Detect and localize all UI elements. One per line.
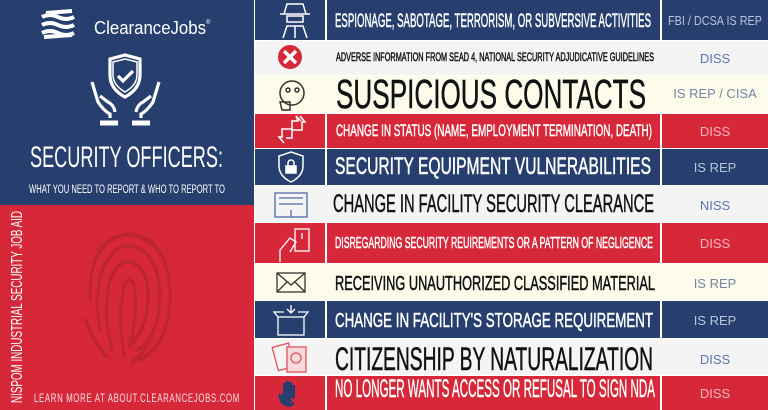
icon: hands with shield	[92, 55, 159, 123]
row 10: DISS	[700, 352, 730, 367]
panel: left intro	[0, 0, 254, 410]
icon: building	[275, 193, 307, 217]
row 5: IS REP	[694, 160, 736, 175]
icon: spy	[280, 4, 310, 38]
row 2	[255, 41, 768, 75]
row 9: IS REP	[694, 313, 736, 328]
icon: fingerprint	[86, 234, 170, 362]
title: SECURITY OFFICERS:	[30, 141, 223, 174]
footer link: LEARN MORE AT ABOUT.CLEARANCEJOBS.COM	[34, 391, 240, 405]
logo: ClearanceJobs: ®	[206, 19, 211, 26]
row 6	[255, 186, 768, 222]
icon: envelope	[277, 273, 305, 292]
row 7: DISS	[700, 236, 730, 251]
subtitle: WHAT YOU NEED TO REPORT & WHO TO REPORT TO	[29, 184, 225, 196]
row 7	[255, 223, 768, 263]
row 1	[255, 0, 768, 40]
row 4	[255, 114, 768, 148]
icon: stop hand	[278, 381, 296, 407]
icon: red x bubble	[278, 45, 302, 69]
row 3: IS REP / CISA	[673, 86, 757, 101]
icon: box with arrow	[274, 305, 308, 335]
row 11: DISS	[700, 386, 730, 401]
row 6: NISS	[700, 198, 730, 213]
row 9	[255, 301, 768, 338]
row 4: DISS	[700, 124, 730, 139]
icon: lock shield	[279, 152, 303, 182]
row 2: DISS	[700, 51, 730, 66]
logo: ClearanceJobs: ClearanceJobs	[94, 18, 206, 38]
row 8	[255, 264, 768, 300]
icon: arrows	[279, 116, 305, 143]
icon: hand with card	[280, 229, 309, 262]
row 8: IS REP	[694, 276, 736, 291]
logo: ClearanceJobs	[42, 11, 211, 38]
icon: thinking face	[280, 81, 304, 110]
row 5	[255, 149, 768, 185]
row 11	[255, 375, 768, 410]
icon: passports	[272, 343, 306, 372]
vertical label: NISPOM INDUSTRIAL SECURITY JOB AID	[9, 211, 26, 403]
